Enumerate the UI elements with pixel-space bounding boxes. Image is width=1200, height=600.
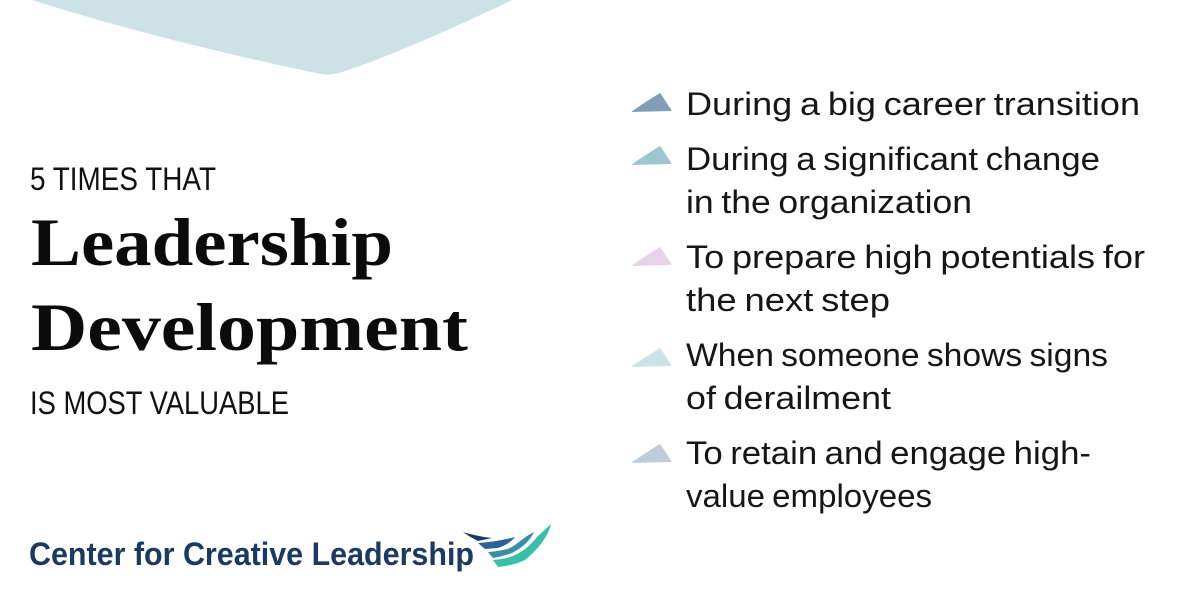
decorative top shape <box>32 0 512 74</box>
bullet icon <box>632 146 671 164</box>
item text <box>686 435 1091 514</box>
item text: To prepare high potentials for <box>686 239 1145 275</box>
logo mark: swoosh <box>463 524 551 567</box>
list item 1 <box>632 86 1140 122</box>
subtitle: is most valuable: IS MOST VALUABLE <box>30 385 289 421</box>
eyebrow: 5 times that: 5 TIMES THAT <box>30 161 216 197</box>
logo wordmark: Center for Creative Leadership <box>29 536 474 572</box>
item text: To retain and engage high- <box>686 435 1091 471</box>
item text: the next step <box>686 282 890 318</box>
bullet icon <box>632 248 671 266</box>
item text: value employees <box>686 478 932 514</box>
bullet icon <box>632 348 671 366</box>
list item 2 <box>632 141 1100 220</box>
item text: When someone shows signs <box>686 337 1108 373</box>
item text: of derailment <box>686 380 891 416</box>
bullet icon <box>632 444 671 462</box>
heading: Development: Development <box>31 289 468 365</box>
list <box>632 86 1145 514</box>
list item 4 <box>632 337 1108 416</box>
item text: in the organization <box>686 184 972 220</box>
logo <box>29 524 551 572</box>
list item 3 <box>632 239 1145 318</box>
heading: Leadership: Leadership <box>31 204 393 280</box>
list item 5 <box>632 435 1091 514</box>
item text: During a big career transition <box>686 86 1140 122</box>
item text <box>686 337 1108 416</box>
item text <box>686 141 1100 220</box>
item text: During a significant change <box>686 141 1100 177</box>
bullet icon <box>632 94 671 112</box>
item text <box>686 239 1145 318</box>
title block <box>30 161 468 421</box>
